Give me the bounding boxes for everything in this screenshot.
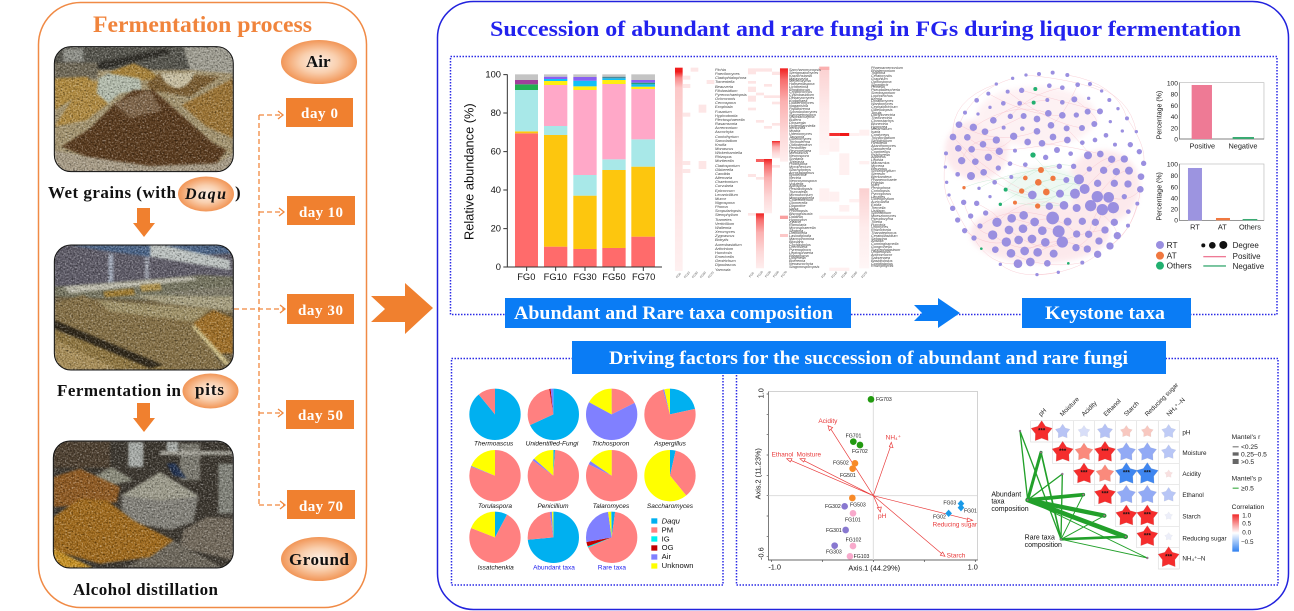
label: wet grains: Wet grains (with: [48, 183, 177, 202]
dashed connectors: [234, 111, 285, 509]
env labels: Reducing sugar: [933, 522, 978, 529]
ellipse: air: Air: [306, 52, 331, 71]
colour scale: 0.5: [1242, 521, 1252, 528]
label: alcohol distillation: Alcohol distillation: [73, 580, 219, 599]
mantel links: [1020, 431, 1147, 558]
axis labels: -0.6: [756, 547, 765, 560]
bar: abundant and rare taxa composition: Abundant and Rare taxa composition: [514, 303, 833, 324]
mantel legend: [1232, 434, 1267, 511]
sample labels: FG701: [846, 434, 862, 440]
pie labels: Trichosporon: [592, 441, 630, 448]
box: day 50: day 50: [298, 408, 343, 424]
box: day 70: [287, 490, 355, 519]
pie labels: [474, 441, 694, 571]
bar chart: RT AT others: 80: [1171, 173, 1178, 180]
heatmap 3 taxa labels: Phaeoacremonium Phialemonium Togninia Ceratocystis Graphium Ophiostoma Sporothrix Petriella Pseudallescheria Scedosporium Lophotrichus Kernia Doratomyces Wardomyces Cephalotrichum Gibellulopsis Torula Dactylonectria Thelonectria Clonostachys Bionectria Hypocrea Metarhizium Isaria Cordyceps Tolypocladium Simplicillium Hirsutella Akanthomyces Ganoderma Coprinellus Psathyrella Agaricus Lepista Marasmius Mycena Pleurotus Schizophyllum Stereum Bjerkandera Phanerochaete Phlebia Irpex Peniophora Coriolopsis Pycnoporus Lenzites Gloeophyllum Auricularia Exidia Tremella Ustilago Sporisorium Moesziomyces Pseudozyma Tilletia Puccinia Uromyces Rhizoctonia Thanatephorus Ceratobasidium Sebacina Absidia Cunninghamella Gongronella Syncephalastrum Umbelopsis Actinomucor Saksenaea Basidiobolus Conidiobolus Rhizophlyctis: [871, 66, 903, 268]
row labels: Reducing sugar: [1182, 535, 1227, 542]
colour scale: −0.5: [1241, 539, 1254, 546]
row labels: Ethanol: [1182, 492, 1204, 499]
heatmap 3: FG10: [830, 270, 838, 279]
pie: Talaromyces: [599, 463, 624, 488]
mantel legend: 0.25–0.5: [1241, 451, 1267, 458]
significance marks: [1038, 428, 1173, 560]
pie legend: [651, 517, 694, 570]
pie legend: Unknown: [662, 561, 694, 570]
ellipse: Daqu: Daqu: [184, 186, 226, 203]
network graph: [944, 71, 1146, 276]
pie labels: Talaromyces: [593, 503, 630, 510]
sample labels: [825, 397, 977, 560]
bar chart: RT AT others: Others: [1239, 223, 1261, 232]
bar chart: positive and negative: 40: [1171, 114, 1178, 121]
bar chart: RT AT others: RT: [1190, 223, 1200, 232]
pie labels: Rare taxa: [598, 564, 626, 571]
row labels: NH₄⁺–N: [1182, 556, 1206, 563]
sample labels: FG702: [852, 449, 868, 455]
photo: wet grains pile: [54, 47, 233, 172]
bar: driving factors: [572, 341, 1166, 374]
pie: Torulaspora: [482, 463, 508, 488]
heatmap 2: FG50: [772, 270, 780, 278]
env labels: Starch: [947, 553, 966, 560]
pie: Issatchenkia: [482, 524, 508, 550]
sample labels: FG502: [833, 460, 849, 466]
bar chart: positive and negative: 80: [1171, 92, 1178, 99]
column labels: [1037, 382, 1187, 418]
mantel legend: ≥0.5: [1241, 486, 1254, 493]
significance marks: ***: [1101, 492, 1109, 498]
pie: Rare taxa: [599, 524, 624, 550]
pie charts: [474, 401, 694, 571]
stacked bar chart: 40: [491, 185, 501, 195]
label: fermentation in: Fermentation in: [57, 381, 182, 400]
arrow: blue: [914, 298, 960, 328]
ordination plot: [754, 388, 978, 573]
sample labels: FG03: [943, 500, 956, 506]
heatmap 3: FG0: [820, 272, 827, 279]
sample labels: FG501: [840, 473, 856, 479]
column labels: NH₄⁺–N: [1165, 396, 1187, 418]
heatmap 3: [819, 67, 869, 279]
pie labels: Aspergillus: [653, 441, 687, 448]
heatmap 2: [748, 68, 788, 278]
significance marks: ***: [1123, 471, 1130, 477]
network legend: AT: [1167, 250, 1177, 260]
panel: succession of fungi: [438, 2, 1288, 610]
node labels: composition: [991, 506, 1029, 513]
ellipse: ground: [281, 537, 357, 581]
bar chart: positive and negative: Percentage (%): [1157, 91, 1164, 139]
significance marks: ***: [1165, 554, 1173, 560]
heatmap 2: FG10: [756, 270, 764, 278]
sample labels: FG301: [826, 528, 842, 534]
heatmap 3: FG50: [850, 270, 858, 279]
bar chart: RT AT others: 20: [1171, 207, 1178, 214]
significance marks: ***: [1059, 449, 1067, 455]
env labels: Ethanol: [772, 452, 793, 459]
bar: keystone taxa: [1022, 298, 1191, 328]
stacked bar chart: FG30: [573, 272, 597, 282]
bar: keystone taxa: Keystone taxa: [1045, 303, 1166, 324]
box: day 0: day 0: [301, 106, 338, 122]
bar chart: RT AT others: 0: [1174, 218, 1178, 225]
sample labels: FG101: [845, 517, 861, 523]
ellipse: Daqu: [178, 176, 234, 212]
axis labels: 1.0: [756, 388, 765, 398]
photo: alcohol distillation: [53, 441, 233, 568]
axis labels: Axis.2 (11.23%): [754, 448, 763, 499]
box: day 10: day 10: [299, 205, 343, 221]
label: closing bracket: ): [235, 183, 241, 202]
node labels: Abundant: [991, 492, 1021, 499]
bar chart: RT AT others: Percentage (%): [1157, 172, 1164, 221]
box: day 0: [286, 98, 353, 127]
pie labels: Issatchenkia: [478, 564, 514, 571]
network legend: [1156, 240, 1265, 271]
mantel legend: Mantel's r: [1232, 434, 1261, 441]
heading: fermentation process: Fermentation process: [93, 12, 312, 37]
bar: abundant and rare taxa composition: [505, 298, 851, 328]
pie: Trichosporon: [599, 401, 624, 427]
bar chart: RT AT others: 40: [1171, 195, 1178, 202]
bar chart: RT AT others: 100: [1167, 162, 1178, 169]
heatmap 1: FG50: [699, 270, 707, 279]
sample labels: FG02: [933, 515, 946, 521]
mantel legend: >0.5: [1241, 459, 1254, 466]
column labels: Starch: [1123, 400, 1141, 418]
bar chart: RT AT others: [1157, 162, 1264, 232]
network legend: RT: [1167, 240, 1178, 250]
pie labels: Unidentified-Fungi: [526, 441, 579, 448]
ellipse: ground: Ground: [289, 550, 350, 569]
panel: fermentation process: [38, 2, 366, 608]
colour scale: 1.0: [1242, 513, 1252, 520]
env labels: NH₄⁺: [886, 435, 901, 442]
stacked bar chart: 100: [485, 70, 501, 80]
box: day 30: [287, 294, 354, 324]
dotted frames: [450, 56, 1278, 585]
env labels: pH: [878, 513, 887, 520]
pie legend: Air: [662, 552, 671, 561]
env labels: Moisture: [797, 452, 821, 459]
pie legend: IG: [662, 534, 670, 543]
env labels: [772, 418, 978, 560]
bar chart: positive and negative: 20: [1171, 125, 1178, 132]
sample labels: FG703: [876, 397, 892, 403]
axis labels: Axis.1 (44.29%): [848, 564, 900, 573]
arrow: down 1: [133, 208, 155, 237]
significance marks: ***: [1123, 513, 1130, 519]
sample labels: FG103: [854, 554, 870, 560]
row labels: Acidity: [1182, 471, 1202, 478]
heatmap 3: FG70: [860, 270, 868, 279]
axis labels: -1.0: [768, 562, 781, 571]
heatmap 2: FG70: [780, 270, 788, 278]
mantel legend: <0.25: [1241, 444, 1258, 451]
pie labels: Penicillium: [537, 503, 569, 510]
colour scale: 0.0: [1242, 530, 1252, 537]
heatmap 1 taxa labels: Pichia Paecilomyces Cladophialophora Tomentella Beauveria Filobasidium Pyrenochaetopsis Ochroconis Cercospora Exophiala Fusarium Hyphodontia Plectosphaerella Rasamsonia Acremonium Ascochyta Coniothyrium Sarocladium Knufia Monascus Wickerhamiella Rhizopus Mortierella Cladosporium Gibberella Candida Alternaria Chaetomium Curvularia Epicoccum Lecanicillium Mucor Nigrospora Phoma Scopulariopsis Stemphylium Trametes Verticillium Wallemia Xeromyces Zygoascus Botrytis Aureobasidium Arthrinium Humicola Emericella Geotrichum Dipodascus Yarrowia: [715, 67, 747, 272]
title: Succession of abundant and rare fungi in FGs during liquor fermentation: [490, 16, 1241, 41]
row labels: [1182, 429, 1227, 563]
heatmap 1: FG0: [675, 272, 682, 279]
stacked bar chart: 20: [491, 224, 501, 234]
pie legend: Daqu: [662, 517, 681, 526]
stacked bar chart: Relative abundance (%): [463, 103, 477, 240]
pie: Saccharomyces: [657, 463, 683, 488]
correlation grid: [1031, 421, 1179, 569]
pie: Abundant taxa: [540, 524, 566, 550]
pie: Penicillium: [540, 463, 566, 488]
node labels: Rare taxa: [1025, 534, 1055, 541]
ellipse: air: [281, 40, 357, 84]
stacked bar chart: [463, 70, 662, 282]
node labels: taxa: [991, 499, 1005, 506]
pie: Aspergillus: [657, 401, 683, 427]
row labels: Moisture: [1182, 450, 1207, 457]
arrow: down 2: [133, 403, 155, 432]
stacked bar chart: FG0: [517, 272, 535, 282]
network legend: Degree: [1233, 241, 1259, 250]
pie: Thermoascus: [482, 401, 508, 427]
stacked bar chart: FG10: [544, 272, 567, 282]
bar chart: positive and negative: [1157, 80, 1264, 151]
axis labels: 1.0: [968, 562, 978, 571]
sample labels: FG302: [825, 504, 841, 510]
box: day 30: day 30: [298, 303, 343, 319]
stacked bar chart: 60: [491, 147, 501, 157]
sample labels: FG102: [846, 538, 862, 544]
significance marks: ***: [1144, 513, 1151, 519]
axis labels: [754, 388, 978, 573]
significance marks: ***: [1080, 471, 1088, 477]
heatmap 1: [675, 68, 715, 279]
sample labels: FG503: [850, 503, 866, 509]
pie legend: PM: [662, 526, 673, 535]
network legend: Negative: [1233, 262, 1265, 271]
ellipse: pits: [182, 374, 238, 408]
arrow: big orange: [371, 283, 433, 334]
sample points: [831, 396, 964, 560]
sample labels: FG303: [826, 549, 842, 555]
pie legend: OG: [662, 543, 674, 552]
bar chart: RT AT others: 60: [1171, 184, 1178, 191]
colour scale: [1232, 513, 1254, 552]
network legend: Positive: [1233, 252, 1261, 261]
column labels: pH: [1037, 407, 1048, 418]
heatmap 1: FG10: [683, 270, 691, 279]
heatmap 2: FG0: [748, 271, 755, 278]
row labels: Starch: [1182, 514, 1201, 521]
mantel correlation: [991, 382, 1267, 569]
stacked bar chart: FG50: [602, 272, 626, 282]
column labels: Moisture: [1059, 396, 1081, 418]
significance marks: ***: [1038, 428, 1046, 434]
env arrows: [787, 426, 973, 556]
bar chart: positive and negative: Negative: [1228, 142, 1257, 151]
photo: fermentation pits: [54, 245, 233, 370]
box: day 10: [287, 196, 355, 225]
bar chart: RT AT others: AT: [1218, 223, 1227, 232]
sample labels: FG01: [964, 509, 977, 515]
bar chart: positive and negative: 60: [1171, 103, 1178, 110]
pie labels: Thermoascus: [474, 441, 514, 448]
pie labels: Abundant taxa: [533, 564, 575, 571]
bar chart: positive and negative: 100: [1167, 80, 1178, 87]
heatmap 1: FG30: [691, 270, 699, 279]
column labels: Reducing sugar: [1144, 382, 1180, 418]
bar chart: positive and negative: 0: [1174, 136, 1178, 143]
pie labels: Saccharomyces: [647, 503, 694, 510]
column labels: Ethanol: [1102, 398, 1123, 418]
row labels: pH: [1182, 429, 1191, 436]
heatmap 1: FG70: [707, 270, 715, 279]
mantel legend: Correlation: [1232, 504, 1264, 511]
node labels: composition: [1025, 542, 1062, 549]
bar: driving factors: Driving factors for the succession of abundant and rare fungi: [609, 348, 1128, 369]
column labels: Acidity: [1080, 399, 1099, 418]
box: day 70: day 70: [299, 499, 343, 515]
heatmap 2: FG30: [764, 270, 772, 278]
pie labels: Torulaspora: [478, 503, 512, 510]
network legend: Others: [1167, 261, 1192, 271]
node labels: [991, 492, 1062, 549]
heatmap 3: FG30: [840, 270, 848, 279]
significance marks: ***: [1144, 533, 1151, 539]
star matrix: [1031, 420, 1179, 567]
box: day 50: [286, 400, 354, 429]
pie: Unidentified-Fungi: [540, 401, 566, 427]
heatmap 2 taxa labels: Saccharomycopsis Sterigmatomyces Kazachstania Malassezia Meyerozyma Hanseniaspora Lichtheimia Rhodotorula Cryptococcus Cystobasidium Debaryomyces Kodamaea Lodderomyces Naganishia Papiliotrema Sporobolomyces Symmetrospora Vishniacozyma Bullera Dioszegia Holtermanniella Itersonilia Mrakia Udeniomyces Tausonia Guehomyces Trichoderma Oidiodendron Penicillifer Peyronellaea Microascus Neurospora Sordaria Thielavia Podospora Myrothecium Stachybotrys Acrostalagmus Ilyonectria Nectria Neocosmospora Volutella Apiospora Pestalotiopsis Truncatella Microdochium Monographella Colletotrichum Glomerella Diaporthe Valsa Phomopsis Biscogniauxia Daldinia Hypoxylon Xylaria Ramularia Mycosphaerella Septoria Dothiorella Lasiodiplodia Macrophomina Bipolaris Cochliobolus Drechslera Pyrenophora Leptosphaeria Paraphoma Didymella Boeremia Neoascochyta Stagonosporopsis: [789, 68, 821, 269]
stacked bar chart: 80: [491, 108, 501, 118]
stacked bar chart: FG70: [632, 272, 655, 282]
significance marks: ***: [1144, 471, 1151, 477]
env labels: Acidity: [818, 418, 838, 425]
mantel legend: Mantel's p: [1232, 475, 1262, 482]
bar chart: positive and negative: Positive: [1189, 142, 1215, 151]
ellipse: pits: pits: [195, 380, 224, 399]
significance marks: ***: [1101, 449, 1109, 455]
stacked bar chart: 0: [496, 262, 501, 272]
